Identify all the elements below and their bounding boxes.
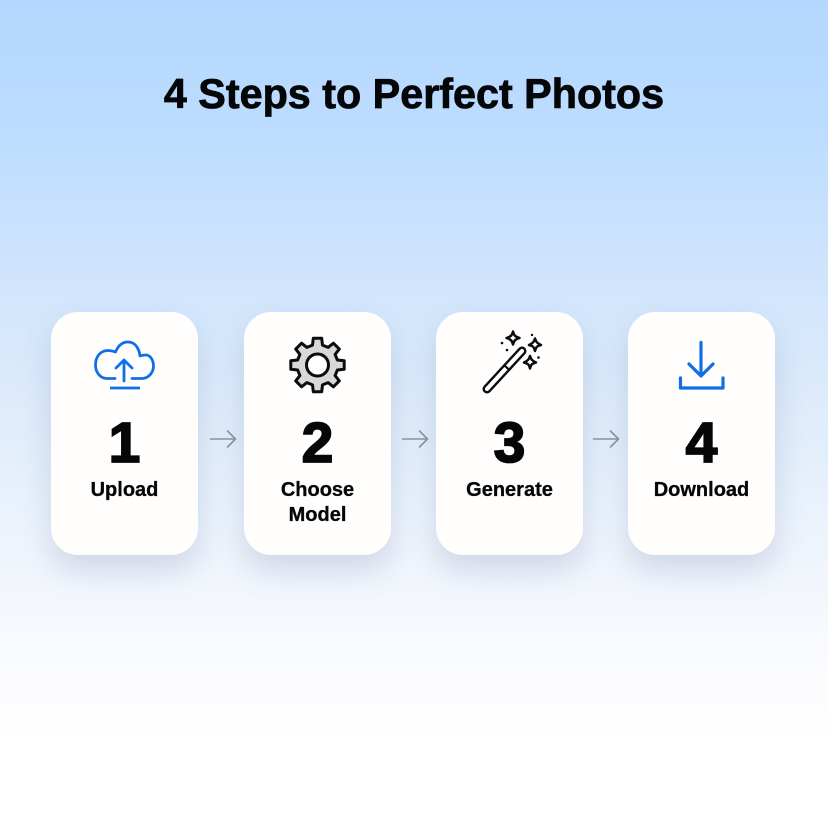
label: download: Download — [654, 478, 749, 500]
arrow 1 to 2 — [210, 430, 236, 448]
number 4: 4 — [686, 411, 717, 475]
panel: step 3 generate — [436, 312, 583, 555]
icon: gear — [289, 336, 346, 394]
panel: step 2 choose model — [244, 312, 391, 555]
label: choose model: Choose — [281, 478, 354, 500]
label: choose model — [281, 478, 354, 526]
panel: step 1 upload — [51, 312, 198, 555]
panel: step 4 download — [628, 312, 775, 555]
icon: magic wand — [482, 330, 542, 394]
label: upload: Upload — [91, 478, 158, 500]
number 3: 3 — [494, 411, 525, 475]
arrow 3 to 4 — [592, 430, 620, 448]
label: generate: Generate — [466, 478, 553, 500]
label: choose model: Model — [289, 504, 346, 526]
title: 4 Steps to Perfect Photos — [164, 71, 664, 117]
icon: cloud upload — [94, 340, 155, 390]
icon: download — [678, 340, 725, 390]
number 2: 2 — [302, 411, 333, 475]
arrow 2 to 3 — [402, 430, 428, 448]
number 1: 1 — [109, 411, 140, 475]
